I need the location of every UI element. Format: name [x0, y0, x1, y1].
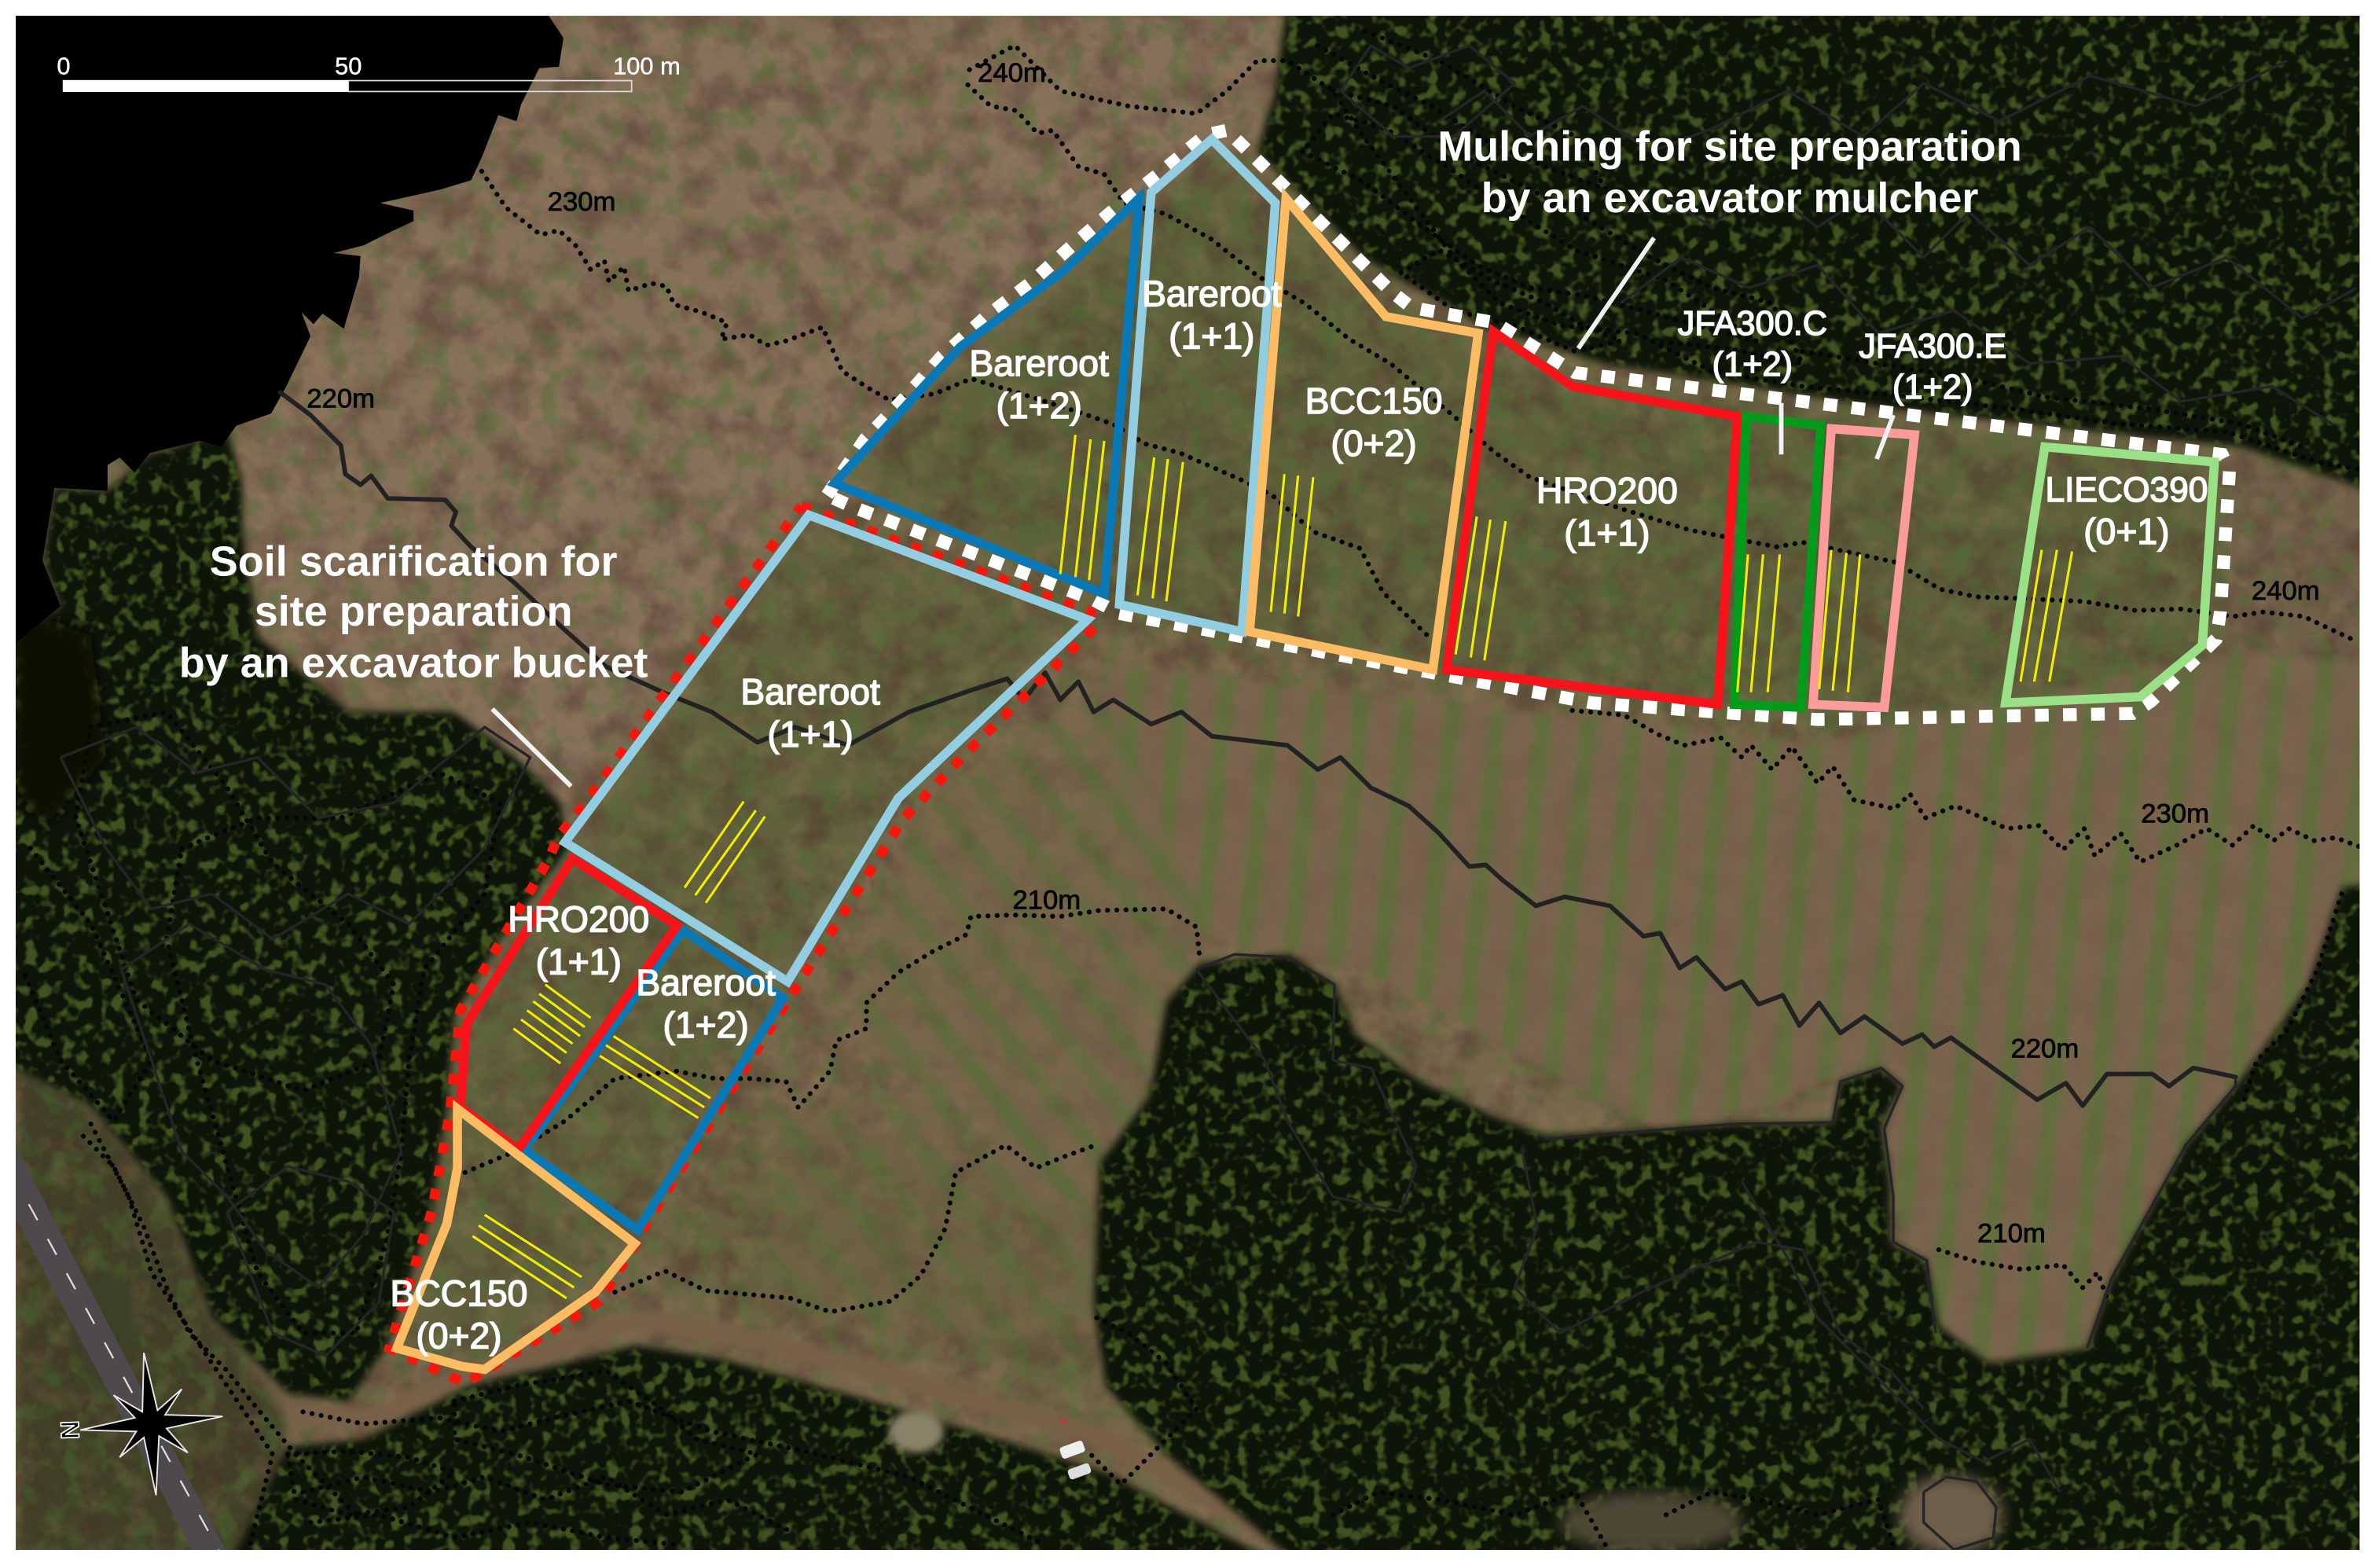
plot label: BCC150 (0+2): (0+2) — [1331, 423, 1417, 464]
plot label: LIECO390 (0+1): (0+1) — [2083, 511, 2170, 552]
plot label: BCC150 (0+2) — [1305, 380, 1442, 464]
plot label: Bareroot (1+2) lower: (1+2) — [663, 1004, 749, 1045]
parked vehicles — [1059, 1419, 1092, 1480]
elevation labels: 220m — [307, 384, 375, 413]
plot label: HRO200 (1+1) lower: (1+1) — [536, 941, 622, 982]
plot label: Bareroot (1+1) lower: Bareroot — [740, 671, 880, 712]
plot label: Bareroot (1+1) — [1142, 273, 1282, 356]
plot: HRO200 lower — [461, 859, 677, 1150]
scale bar: 0 — [57, 52, 71, 79]
callout: soil scarification: Soil scarification for — [210, 538, 617, 585]
plot label: LIECO390 (0+1) — [2045, 471, 2208, 552]
plot: BCC150 upper — [1250, 199, 1478, 670]
plot: Bareroot 1+1 upper — [1119, 139, 1276, 632]
plot: BCC150 lower — [397, 1109, 635, 1369]
scale bar: 50 — [335, 52, 362, 79]
plot: Bareroot 1+2 lower — [524, 930, 783, 1230]
plot label: JFA300.E (1+2): (1+2) — [1892, 369, 1973, 406]
callout: soil scarification — [179, 538, 648, 687]
plot label: Bareroot (1+2) lower: Bareroot — [636, 962, 776, 1003]
north arrow compass: N — [55, 1420, 85, 1440]
plot label: HRO200 (1+1) — [1536, 470, 1678, 553]
plot label: Bareroot (1+1) lower: (1+1) — [767, 714, 853, 755]
plot label: JFA300.E (1+2): JFA300.E — [1859, 328, 2006, 365]
plot: Bareroot 1+2 upper — [835, 199, 1139, 594]
leader lines — [492, 238, 1893, 786]
plot: LIECO390 — [2006, 447, 2215, 703]
road — [15, 1145, 227, 1560]
plot label: Bareroot (1+1) lower — [740, 671, 880, 755]
callout: mulching: Mulching for site preparation — [1437, 123, 2022, 170]
callout: mulching — [1437, 123, 2022, 222]
plot label: BCC150 (0+2) lower: BCC150 — [391, 1272, 527, 1313]
plot: JFA300.C — [1734, 417, 1821, 707]
elevation labels: 240m — [978, 58, 1046, 88]
plot label: JFA300.C (1+2) — [1678, 305, 1827, 384]
plot label: Bareroot (1+2) lower — [636, 962, 776, 1045]
elevation labels: 230m — [2141, 799, 2209, 829]
north arrow compass — [55, 1353, 222, 1495]
callout: soil scarification: by an excavator bucket — [179, 640, 648, 687]
plot label: Bareroot (1+1): Bareroot — [1142, 273, 1282, 314]
elevation labels: 240m — [2252, 576, 2320, 606]
plots: scarified strip — [397, 515, 1088, 1369]
plot: HRO200 upper — [1447, 332, 1738, 704]
elevation labels: 210m — [1012, 885, 1081, 915]
elevation labels: 220m — [2010, 1034, 2079, 1063]
callout: mulching: by an excavator mulcher — [1481, 174, 1978, 222]
sample rows (yellow lines) — [472, 435, 2072, 1298]
plot label: HRO200 (1+1) lower: HRO200 — [508, 898, 649, 939]
callout: soil scarification: site preparation — [255, 588, 573, 635]
plots: mulched strip — [835, 139, 2215, 707]
plot: JFA300.E — [1813, 428, 1914, 707]
elevation labels: 210m — [1977, 1218, 2046, 1248]
scale bar — [57, 52, 681, 92]
plot label: LIECO390 (0+1): LIECO390 — [2045, 471, 2208, 509]
plot label: Bareroot (1+2): (1+2) — [996, 385, 1082, 426]
plot label: HRO200 (1+1): (1+1) — [1564, 512, 1650, 553]
plot label: BCC150 (0+2) lower — [391, 1272, 527, 1356]
mulching treatment boundary (white dashed) — [827, 130, 2230, 719]
plot label: HRO200 (1+1) lower — [508, 898, 649, 982]
plot label: Bareroot (1+1): (1+1) — [1169, 315, 1254, 356]
plot label: JFA300.C (1+2): JFA300.C — [1678, 305, 1827, 343]
soil scarification boundary (red dashed) — [389, 506, 1096, 1383]
elevation labels: 230m — [548, 187, 615, 217]
plot label: BCC150 (0+2): BCC150 — [1305, 380, 1442, 421]
plot label: HRO200 (1+1): HRO200 — [1536, 470, 1678, 511]
plot label: Bareroot (1+2): Bareroot — [969, 343, 1109, 384]
scale bar: 100 m — [613, 52, 681, 79]
plot label: JFA300.C (1+2): (1+2) — [1712, 346, 1793, 384]
plot label: JFA300.E (1+2) — [1859, 328, 2006, 406]
black no-data area — [15, 15, 563, 644]
elevation labels — [307, 58, 2320, 1248]
plot: Bareroot 1+1 lower — [565, 515, 1088, 982]
plot label: BCC150 (0+2) lower: (0+2) — [416, 1315, 502, 1356]
plot label: Bareroot (1+2) — [969, 343, 1109, 426]
